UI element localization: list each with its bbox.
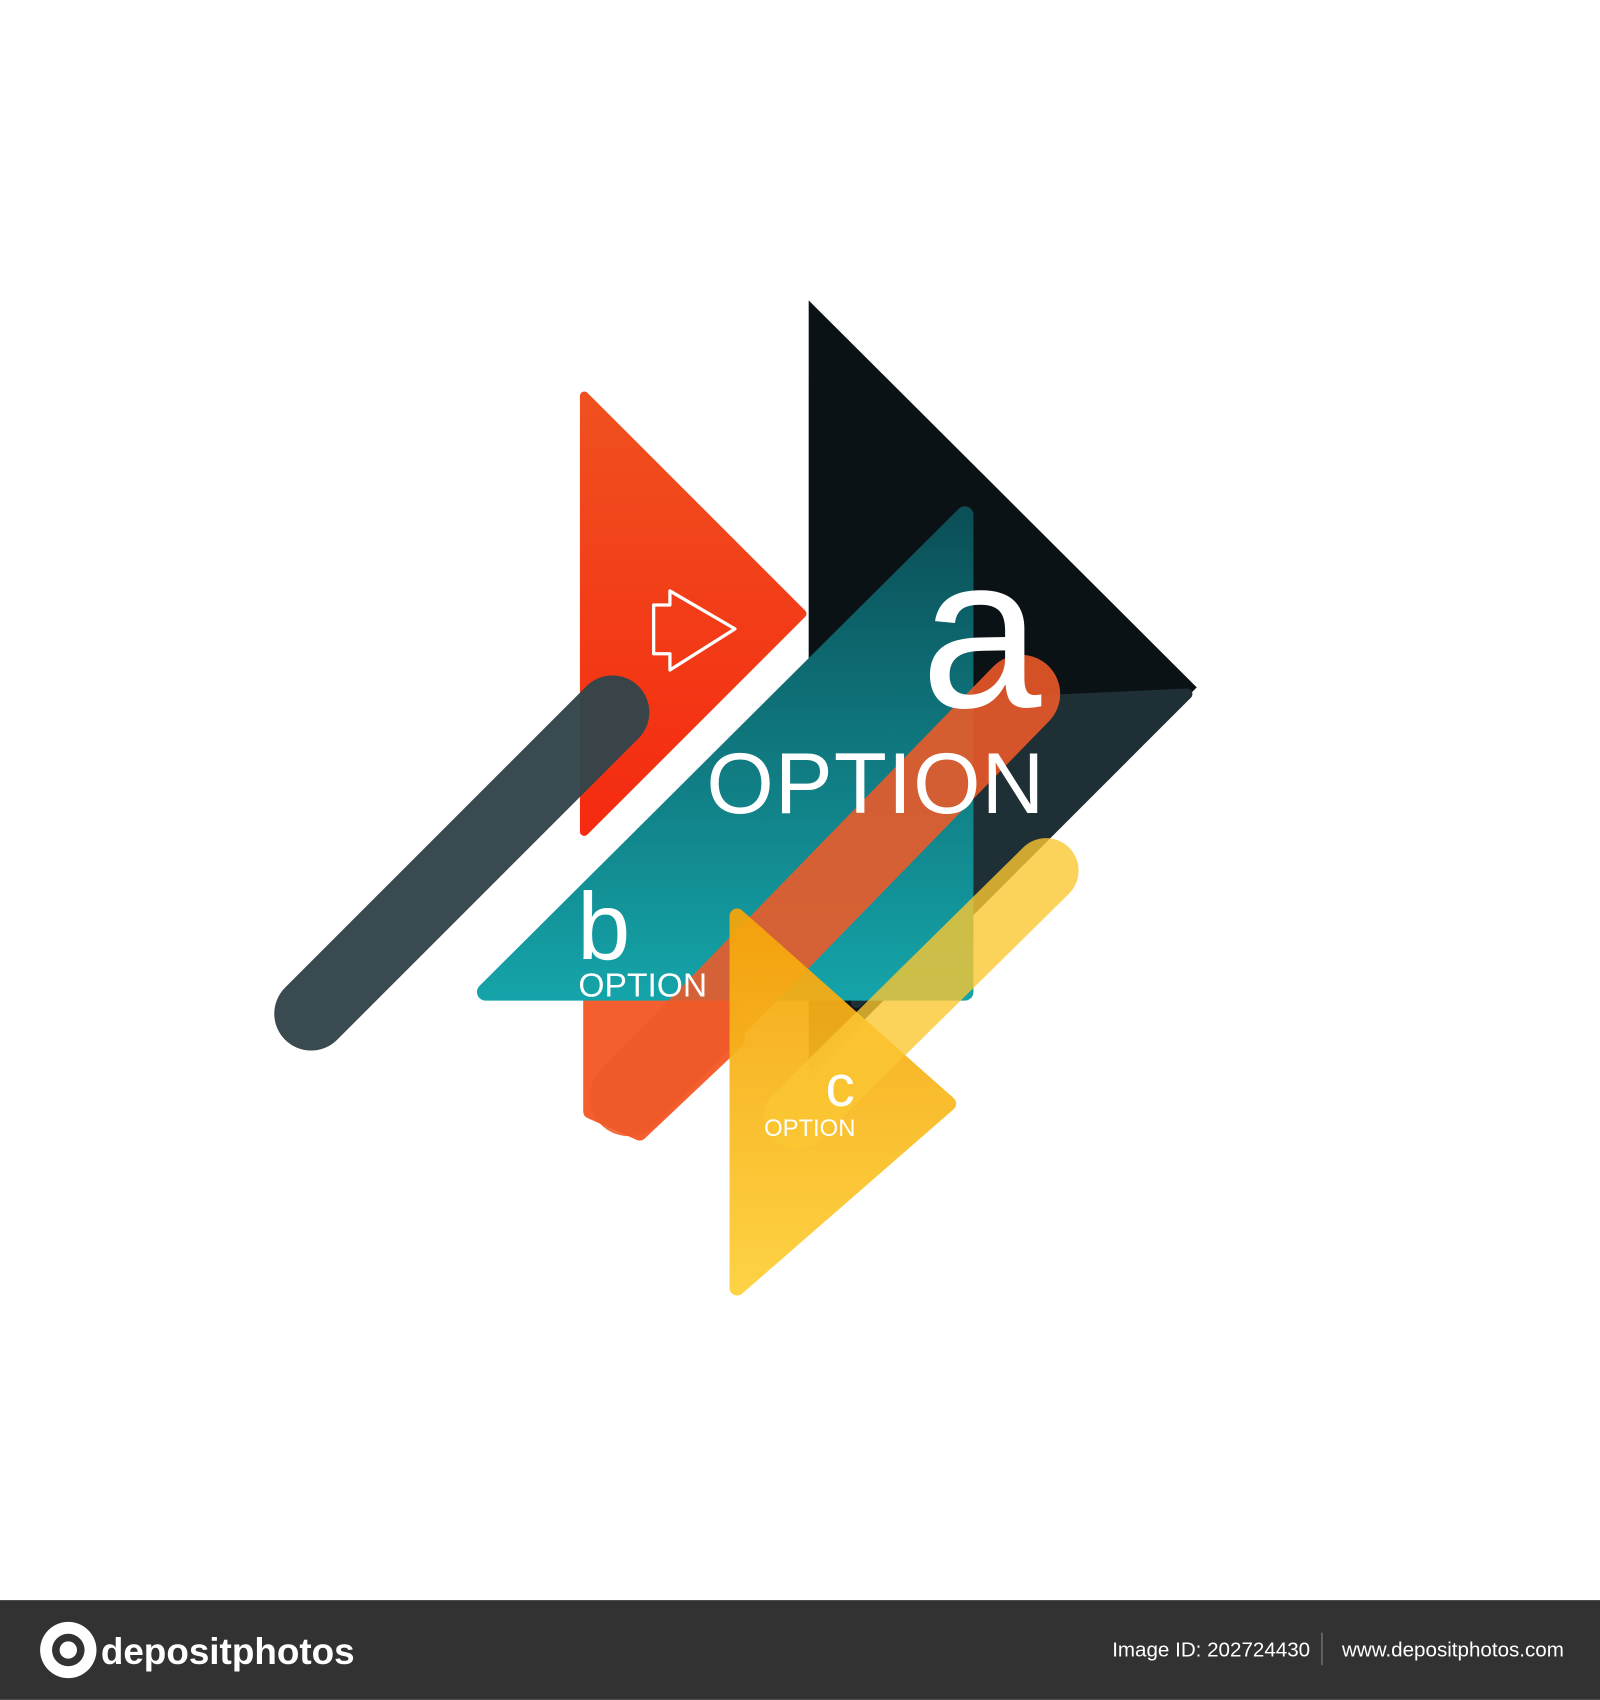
- footer: url: www.depositphotos.com: [1341, 1639, 1564, 1662]
- graphic: red triangle: [584, 396, 802, 832]
- label: option a: a: [921, 511, 1042, 753]
- icon: outline arrow: [654, 591, 735, 670]
- graphic: dark grey bar: [311, 712, 612, 1014]
- graphic: black triangle: [809, 300, 1197, 1075]
- graphic: teal triangle: [486, 515, 965, 992]
- footer: brand: depositphotos: [101, 1631, 355, 1672]
- footer bar: [0, 1600, 1600, 1700]
- graphic: yellow bar: [797, 871, 1046, 1117]
- label: option b: [577, 874, 707, 1004]
- graphic: yellow triangle: [737, 916, 949, 1288]
- label: option c: OPTION: [764, 1115, 855, 1142]
- icon: camera logo: [40, 1622, 96, 1678]
- label: option a: OPTION: [706, 735, 1045, 832]
- graphic: orange bar: [629, 694, 1021, 1097]
- label: option b: OPTION: [578, 967, 707, 1004]
- label: option a: [706, 511, 1045, 832]
- label: option b: b: [577, 874, 630, 980]
- graphic: orange lower shape: [591, 981, 737, 1133]
- label: option c: [764, 1054, 855, 1142]
- label: option c: c: [825, 1054, 855, 1119]
- footer: image id: Image ID: 202724430: [1112, 1639, 1310, 1662]
